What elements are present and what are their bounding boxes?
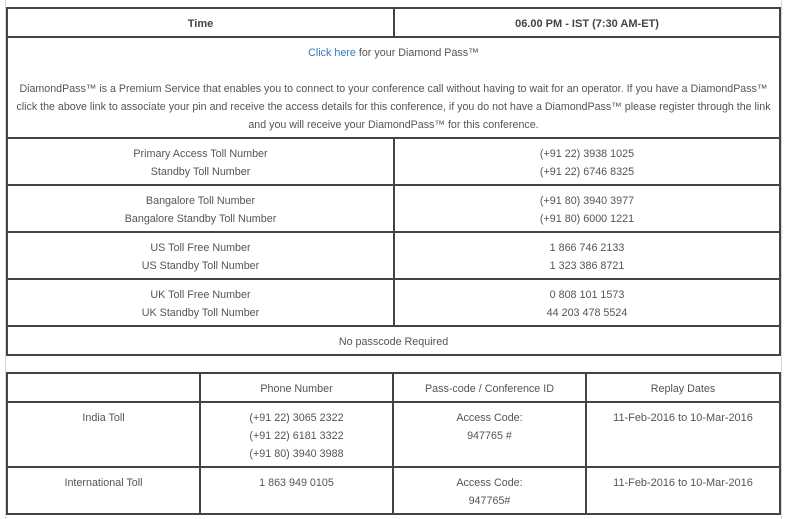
india replay dates: 11-Feb-2016 to 10-Mar-2016 — [613, 412, 753, 424]
international access code: 947765# — [469, 495, 510, 507]
us numbers — [550, 242, 624, 272]
uk numbers: 44 203 478 5524 — [547, 307, 627, 319]
uk labels — [142, 289, 260, 319]
india access code: Access Code: — [456, 412, 523, 424]
primary access labels: Primary Access Toll Number — [133, 148, 268, 160]
international replay dates: 11-Feb-2016 to 10-Mar-2016 — [613, 477, 753, 489]
india toll numbers: (+91 80) 3940 3988 — [249, 448, 344, 460]
phone number header: Phone Number — [260, 383, 333, 395]
india toll numbers: (+91 22) 6181 3322 — [249, 430, 344, 442]
bangalore numbers: (+91 80) 6000 1221 — [540, 213, 634, 225]
passcode note: No passcode Required — [339, 336, 448, 348]
uk numbers: 0 808 101 1573 — [550, 289, 624, 301]
india toll label: India Toll — [82, 412, 125, 424]
international toll number: 1 863 949 0105 — [259, 477, 334, 489]
india toll numbers — [249, 412, 344, 460]
international access code — [456, 477, 523, 507]
diamond pass description: click the above link to associate your pin and receive the access details for this conference, if you do not have a DiamondPass™ please register through the link — [16, 101, 771, 113]
primary access numbers: (+91 22) 3938 1025 — [540, 148, 634, 160]
pass-code header: Pass-code / Conference ID — [425, 383, 554, 395]
table: conference call access numbers — [6, 7, 781, 356]
bangalore numbers — [540, 195, 634, 225]
us numbers: 1 323 386 8721 — [550, 260, 624, 272]
international toll label: International Toll — [64, 477, 143, 489]
india access code: 947765 # — [467, 430, 512, 442]
india toll numbers: (+91 22) 3065 2322 — [249, 412, 344, 424]
diamond pass description — [16, 83, 771, 131]
india access code — [456, 412, 523, 442]
us labels: US Standby Toll Number — [142, 260, 259, 272]
bangalore numbers: (+91 80) 3940 3977 — [540, 195, 634, 207]
international access code: Access Code: — [456, 477, 523, 489]
time value: 06.00 PM - IST (7:30 AM-ET) — [515, 18, 659, 30]
us labels — [142, 242, 260, 272]
diamond pass link: Click here for your Diamond Pass™ — [308, 47, 479, 59]
bangalore labels: Bangalore Standby Toll Number — [125, 213, 276, 225]
us numbers: 1 866 746 2133 — [550, 242, 624, 254]
bangalore labels: Bangalore Toll Number — [146, 195, 255, 207]
table: replay numbers — [6, 372, 781, 515]
diamond pass description: DiamondPass™ is a Premium Service that enables you to connect to your conference call without having to wait for an operator. If you have a DiamondPass™ — [19, 83, 768, 95]
replay dates header: Replay Dates — [651, 383, 715, 395]
primary access numbers: (+91 22) 6746 8325 — [540, 166, 634, 178]
uk numbers — [546, 289, 628, 319]
bangalore labels — [125, 195, 276, 225]
primary access numbers — [540, 148, 634, 178]
primary access labels: Standby Toll Number — [151, 166, 250, 178]
uk labels: UK Standby Toll Number — [142, 307, 259, 319]
diamond pass description: and you will receive your DiamondPass™ for this conference. — [248, 119, 539, 131]
uk labels: UK Toll Free Number — [150, 289, 251, 301]
time label: Time — [188, 18, 213, 30]
us labels: US Toll Free Number — [150, 242, 251, 254]
primary access labels — [133, 148, 268, 178]
